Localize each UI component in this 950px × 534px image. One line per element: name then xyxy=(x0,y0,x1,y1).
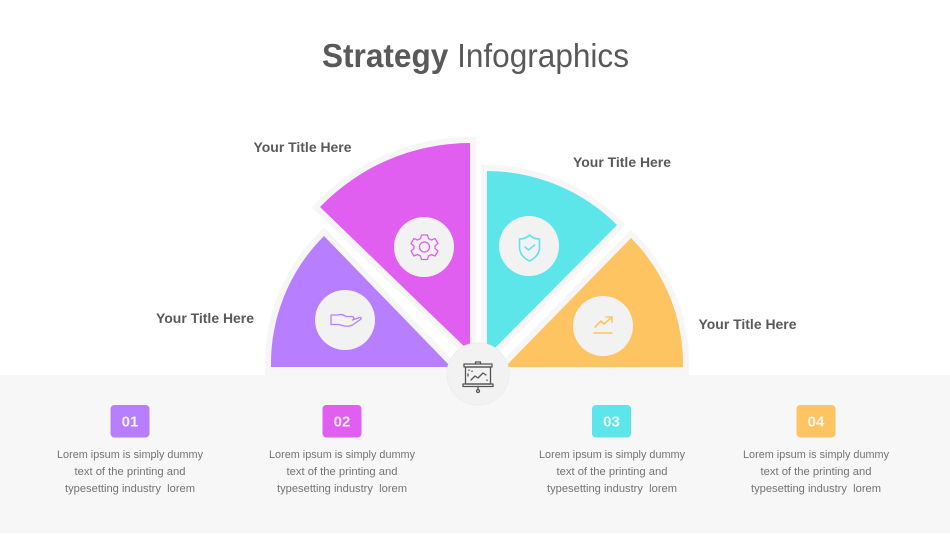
icon: growth chart xyxy=(573,296,633,356)
segment: cyan xyxy=(487,171,617,356)
icon: hand xyxy=(315,290,375,350)
center icon: presentation board xyxy=(447,343,509,405)
segment: magenta xyxy=(320,143,470,352)
item 02 xyxy=(269,405,415,495)
text block 02: typesetting industry lorem xyxy=(277,483,407,495)
text block 01 xyxy=(57,449,203,495)
item 04 xyxy=(743,405,889,495)
badge 02 xyxy=(322,405,362,438)
text block 02: Lorem ipsum is simply dummy xyxy=(269,449,415,461)
badge 01 xyxy=(110,405,150,438)
text block 01: typesetting industry lorem xyxy=(65,483,195,495)
heading: title 4: Your Title Here xyxy=(698,316,797,332)
heading: title 2: Your Title Here xyxy=(254,139,352,155)
text block 01: Lorem ipsum is simply dummy xyxy=(57,449,203,461)
heading: title 1: Your Title Here xyxy=(156,310,254,326)
text block 01: text of the printing and xyxy=(74,466,186,478)
chart base halo xyxy=(265,368,689,376)
text block 03: text of the printing and xyxy=(556,466,668,478)
item 01 xyxy=(57,405,203,495)
text block 04: text of the printing and xyxy=(760,466,872,478)
badge 01: 01 xyxy=(122,414,138,430)
segment: purple xyxy=(271,236,451,367)
badge 03 xyxy=(592,405,631,438)
semicircle chart xyxy=(265,143,689,376)
heading: title 3: Your Title Here xyxy=(573,154,671,170)
text block 04 xyxy=(743,449,889,495)
text block 03: typesetting industry lorem xyxy=(547,483,677,495)
text block 02 xyxy=(269,449,415,495)
badge 03: 03 xyxy=(603,414,620,430)
text block 02: text of the printing and xyxy=(286,466,398,478)
text block 04: Lorem ipsum is simply dummy xyxy=(743,449,889,461)
text block 03 xyxy=(539,449,685,495)
text block 04: typesetting industry lorem xyxy=(751,483,881,495)
title: Strategy Infographics xyxy=(322,37,629,74)
text block 03: Lorem ipsum is simply dummy xyxy=(539,449,685,461)
icon: shield xyxy=(499,216,559,276)
segment: orange xyxy=(505,238,683,367)
item 03 xyxy=(539,405,685,495)
bottom panel xyxy=(0,375,950,533)
badge 04 xyxy=(796,405,836,438)
icon: gear xyxy=(394,217,454,277)
badge 02: 02 xyxy=(334,414,350,430)
badge 04: 04 xyxy=(808,414,825,430)
